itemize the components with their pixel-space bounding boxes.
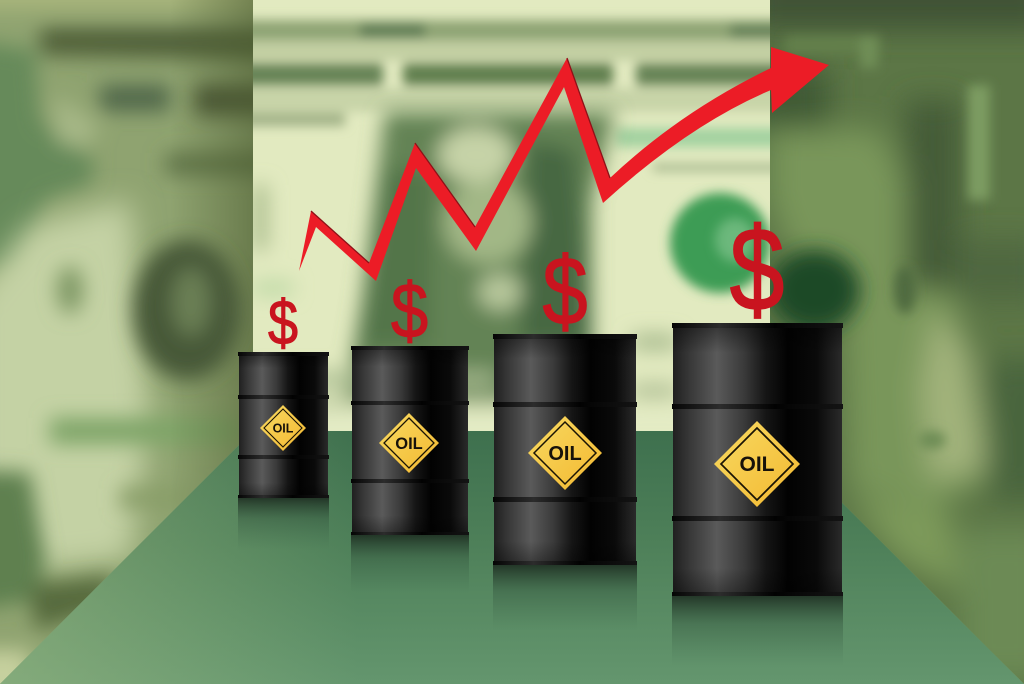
- dollar sign 2: $: [391, 268, 428, 355]
- dollar sign 4: $: [730, 204, 784, 335]
- right wall: blurred dollar bill: [750, 0, 1024, 684]
- reflection: barrel 4: [672, 596, 843, 666]
- reflection: barrel 3: [493, 565, 637, 630]
- oil barrel 3: [493, 334, 637, 565]
- oil label diamond: OIL: [395, 435, 423, 453]
- left wall: blurred dollar bill: [0, 0, 253, 684]
- oil label diamond: OIL: [740, 453, 775, 476]
- oil barrel 4: [672, 323, 843, 596]
- oil label diamond: [260, 405, 306, 451]
- oil label diamond: OIL: [548, 443, 582, 465]
- oil label diamond: [379, 413, 439, 473]
- oil label diamond: [528, 416, 602, 490]
- dollar sign 1: $: [268, 289, 298, 359]
- reflection: barrel 2: [351, 535, 469, 593]
- oil barrel 2: [351, 346, 469, 535]
- dollar sign 3: $: [542, 236, 588, 345]
- floor: [0, 431, 1024, 684]
- oil label diamond: OIL: [273, 422, 294, 436]
- oil barrel 1: [238, 352, 329, 498]
- red rising arrow: [299, 47, 829, 281]
- back wall: blurred dollar bill: [230, 0, 796, 435]
- reflection: barrel 1: [238, 498, 329, 550]
- oil label diamond: [714, 421, 800, 507]
